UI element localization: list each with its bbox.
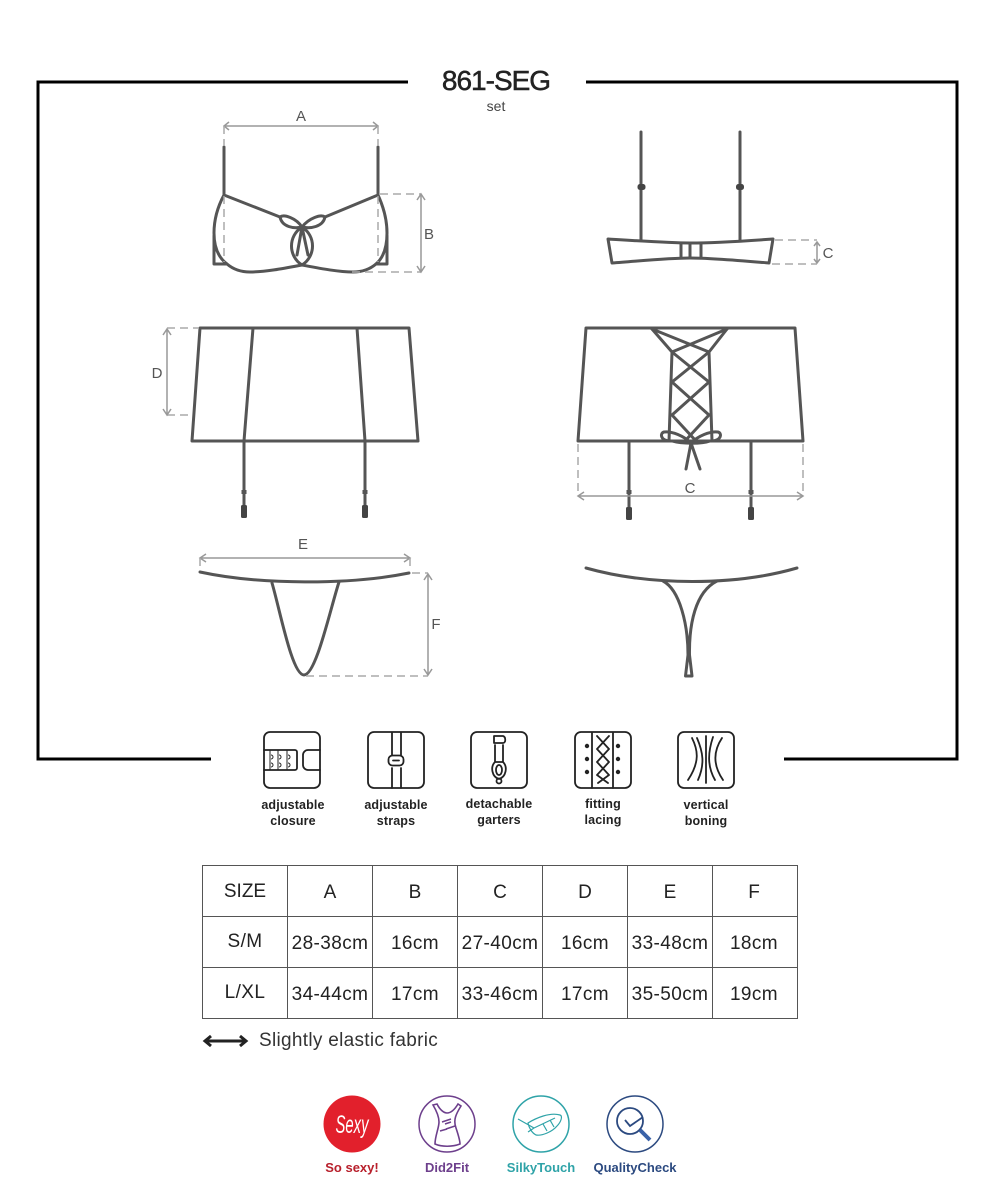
size table: E bbox=[664, 882, 676, 903]
size table: C bbox=[493, 882, 507, 903]
thong front diagram bbox=[200, 572, 409, 675]
size table: 17cm bbox=[391, 984, 439, 1005]
title: 861-SEG bbox=[442, 65, 550, 96]
badge: SilkyTouch: SilkyTouch bbox=[507, 1160, 575, 1175]
badge: Did2Fit: Did2Fit bbox=[425, 1160, 470, 1175]
size table: 16cm bbox=[561, 933, 609, 954]
badge: Did2Fit bbox=[419, 1096, 475, 1175]
size table: 34-44cm bbox=[292, 984, 368, 1005]
measure F: F bbox=[431, 616, 441, 633]
size table: S/M bbox=[228, 931, 262, 952]
caption: fitting lacing: lacing bbox=[584, 813, 622, 827]
measure F bbox=[306, 573, 441, 676]
measure E: E bbox=[298, 536, 308, 553]
caption: detachable garters: detachable bbox=[466, 797, 532, 811]
page frame bbox=[38, 82, 957, 759]
badge: QualityCheck bbox=[593, 1096, 677, 1175]
measure B: B bbox=[424, 226, 434, 243]
size table: L/XL bbox=[225, 982, 265, 1003]
measure A bbox=[224, 108, 378, 262]
elastic fabric note: Slightly elastic fabric bbox=[259, 1030, 438, 1051]
caption: vertical boning: boning bbox=[685, 814, 727, 828]
icon: adjustable closure bbox=[261, 732, 325, 828]
bra front diagram bbox=[214, 147, 387, 272]
measure C bra: C bbox=[823, 245, 834, 262]
icon: fitting lacing bbox=[575, 732, 631, 827]
icon: vertical boning bbox=[678, 732, 734, 828]
caption: adjustable straps: straps bbox=[377, 814, 415, 828]
garter belt front diagram bbox=[192, 328, 418, 518]
title: set bbox=[487, 98, 505, 114]
measure C belt bbox=[578, 444, 803, 500]
size table: 27-40cm bbox=[462, 933, 538, 954]
badge: So sexy bbox=[324, 1096, 380, 1175]
size table: F bbox=[748, 882, 760, 903]
thong back diagram bbox=[586, 568, 797, 676]
caption: adjustable straps: adjustable bbox=[364, 798, 428, 812]
caption: detachable garters: garters bbox=[477, 813, 521, 827]
badge: So sexy: Sexy bbox=[336, 1111, 369, 1139]
size table: 33-46cm bbox=[462, 984, 538, 1005]
bra back diagram bbox=[608, 132, 773, 263]
measure B bbox=[352, 194, 434, 272]
measure D bbox=[152, 328, 199, 415]
caption: fitting lacing: fitting bbox=[585, 797, 621, 811]
size table: D bbox=[578, 882, 592, 903]
measure E bbox=[200, 536, 410, 570]
title bbox=[442, 65, 550, 114]
size table: 19cm bbox=[730, 984, 778, 1005]
size table: 16cm bbox=[391, 933, 439, 954]
size table bbox=[202, 865, 798, 1019]
caption: vertical boning: vertical bbox=[684, 798, 728, 812]
size table: 35-50cm bbox=[632, 984, 708, 1005]
badge: SilkyTouch bbox=[507, 1096, 575, 1175]
caption: adjustable closure: closure bbox=[270, 814, 316, 828]
icon: adjustable straps bbox=[364, 732, 428, 828]
badge: So sexy: So sexy! bbox=[325, 1160, 379, 1175]
measure C belt: C bbox=[685, 480, 696, 497]
size table: 18cm bbox=[730, 933, 778, 954]
size table: SIZE bbox=[224, 881, 266, 902]
size table: 33-48cm bbox=[632, 933, 708, 954]
size table: A bbox=[324, 882, 337, 903]
badge: QualityCheck: QualityCheck bbox=[593, 1160, 677, 1175]
measure C bra bbox=[772, 240, 834, 264]
measure A: A bbox=[296, 108, 306, 125]
size table: B bbox=[409, 882, 421, 903]
icon: detachable garters bbox=[466, 732, 532, 827]
measure D: D bbox=[152, 365, 163, 382]
size table: 28-38cm bbox=[292, 933, 368, 954]
size table: 17cm bbox=[561, 984, 609, 1005]
caption: adjustable closure: adjustable bbox=[261, 798, 325, 812]
garter belt back diagram bbox=[578, 328, 803, 520]
